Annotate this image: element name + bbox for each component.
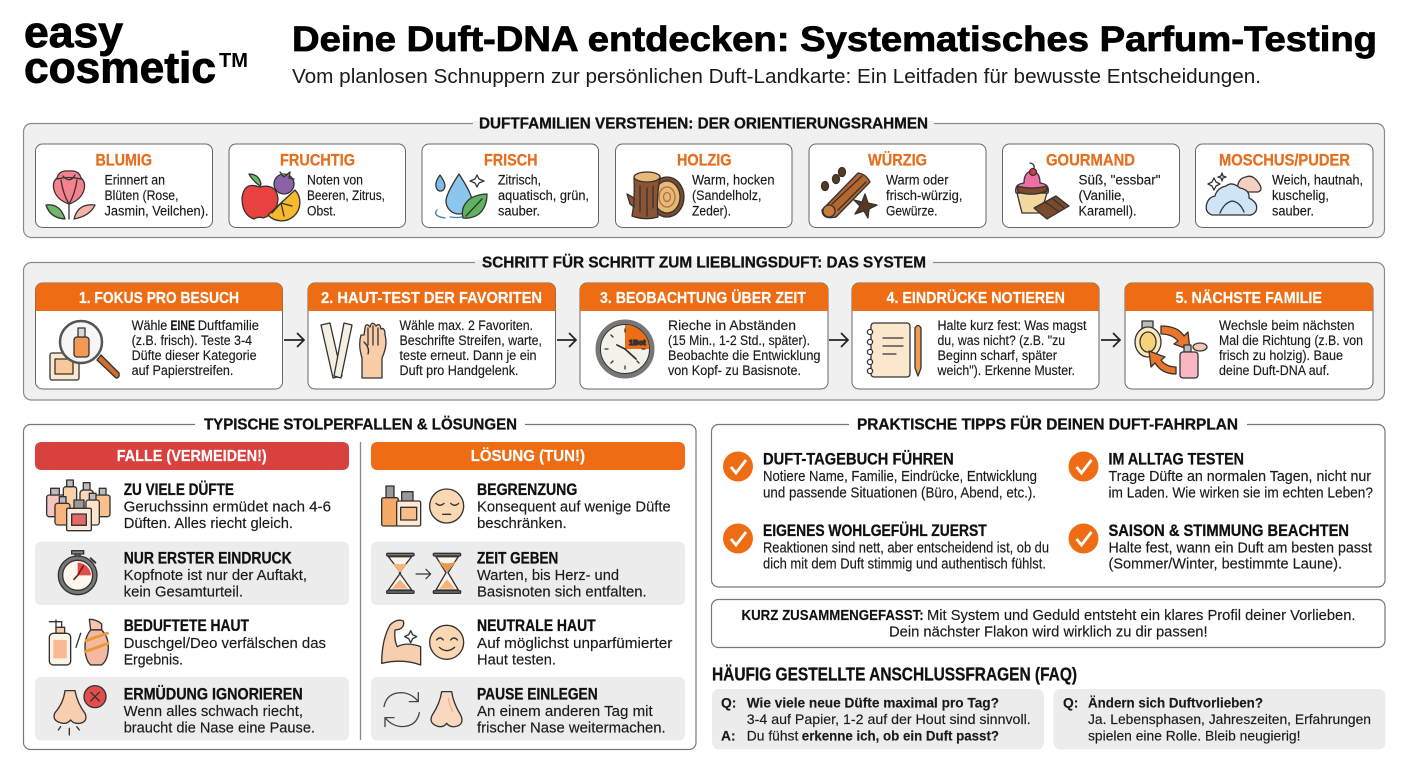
step 2: 2. HAUT-TEST DER FAVORITEN [321, 290, 542, 307]
card: Moschus/Puder: Weich, hautnah, [1272, 172, 1363, 188]
subtitle: Vom planlosen Schnuppern zur persönlichen Duft-Landkarte: Ein Leitfaden für bewusste Entscheidungen. [292, 65, 1261, 88]
icon: tired nose [54, 686, 106, 735]
icon: many bottles [47, 480, 110, 531]
FAQ box 2: Ja. Lebensphasen, Jahreszeiten, Erfahrungen [1088, 712, 1371, 727]
row: Beduftete Haut [49, 616, 326, 668]
card: Moschus/Puder: sauber. [1272, 204, 1314, 218]
step 1: 1. FOKUS PRO BESUCH [79, 290, 239, 307]
step 4: Beginn scharf, später [938, 348, 1058, 363]
icon: cinnamon and star anise [822, 168, 877, 218]
card: Blumig [36, 144, 212, 228]
card: Holzig: Zeder). [692, 204, 731, 218]
logo: easy cosmetic: easy [24, 8, 124, 57]
step 3: (15 Min., 1-2 Std., später). [668, 333, 810, 348]
step 5: 5. NÄCHSTE FAMILIE [1176, 289, 1322, 307]
row: Nur erster Eindruck: NUR ERSTER EINDRUCK [124, 548, 292, 567]
row: Pause einlegen [371, 677, 685, 740]
card: Fruchtig: Obst. [307, 204, 336, 218]
callout: Kurz zusammengefasst: Dein nächster Flakon wird wirklich zu dir passen! [889, 625, 1208, 641]
step 2: Duft pro Handgelenk. [400, 363, 518, 378]
logo: easy cosmetic: TM [219, 50, 248, 72]
row: Neutrale Haut: NEUTRALE HAUT [477, 616, 596, 635]
card: Würzig [809, 144, 986, 228]
header: Lösung: LÖSUNG (TUN!) [471, 446, 585, 465]
card: Gourmand: Karamell). [1078, 204, 1136, 218]
step 2: teste erneut. Dann je ein [400, 348, 536, 363]
card: Würzig: Gewürze. [886, 204, 938, 218]
icon: magnifier over bottle [50, 321, 119, 380]
step 2: Beschrifte Streifen, warte, [400, 333, 542, 348]
row: Neutrale Haut [382, 616, 672, 668]
callout: Kurz zusammengefasst [712, 600, 1385, 648]
step 3: von Kopf- zu Basisnote. [668, 363, 801, 378]
card: Würzig: Warm oder [886, 172, 949, 188]
tip: Saison und Stimmung [1068, 522, 1372, 572]
step 5: Mal die Richtung (z.B. von [1219, 333, 1363, 348]
icon: bottles with swap arrows [1135, 321, 1207, 378]
card: Blumig: Erinnert an [104, 172, 165, 188]
icon: arm and smile [382, 620, 464, 665]
header: Lösung [371, 442, 685, 470]
icon: cycle and nose [384, 692, 462, 727]
row: Beduftete Haut: Ergebnis. [124, 652, 183, 668]
logo: easy cosmetic: cosmetic [24, 44, 216, 92]
FAQ box 1: 3-4 auf Papier, 1-2 auf der Hout sind sinnvoll. [747, 712, 1031, 727]
row: Zu viele Düfte: Düften. Alles riecht gleich. [124, 516, 293, 532]
row: Beduftete Haut: BEDUFTETE HAUT [124, 616, 249, 635]
panel: Duftfamilien [24, 116, 1384, 238]
card: Blumig: Jasmin, Veilchen). [104, 204, 208, 218]
card: Blumig: Blüten (Rose, [104, 188, 178, 203]
row: Ermüdung ignorieren: Wenn alles schwach riecht, [124, 704, 303, 720]
tip: Eigenes Wohlgefühl [723, 521, 1049, 572]
card: Blumig: BLUMIG [96, 152, 152, 170]
step 4: weich"). Erkenne Muster. [937, 363, 1075, 378]
row: Ermüdung ignorieren: braucht die Nase eine Pause. [124, 720, 315, 736]
card: Fruchtig [229, 144, 406, 228]
row: Pause einlegen: PAUSE EINLEGEN [477, 684, 598, 703]
tip: Saison und Stimmung: Halte fest, wann ein Duft am besten passt [1108, 540, 1372, 556]
step 1 [36, 283, 282, 389]
card: Gourmand: Süß, "essbar" [1078, 172, 1161, 188]
icon: water drop and leaf [436, 174, 487, 218]
step 5: Wechsle beim nächsten [1219, 318, 1354, 333]
arrow 1 [284, 333, 304, 347]
panel: Stolperfallen [24, 414, 696, 750]
FAQ box 1 [712, 689, 1044, 750]
row: Nur erster Eindruck [35, 542, 349, 605]
tip: Eigenes Wohlgefühl: dich mit dem Duft stimmig und authentisch fühlst. [763, 556, 1046, 572]
tip: Saison und Stimmung: SAISON & STIMMUNG BEACHTEN [1108, 522, 1349, 540]
icon: paper strips and hand [321, 323, 386, 378]
icon: powder cloud [1206, 173, 1261, 215]
FAQ box 1: A: [721, 728, 736, 743]
heading: Duftfamilien: DUFTFAMILIEN VERSTEHEN: DER ORIENTIERUNGSRAHMEN [479, 116, 928, 132]
heading: Praktische Tipps: PRAKTISCHE TIPPS FÜR DEINEN DUFT-FAHRPLAN [857, 414, 1238, 434]
step 3 [580, 283, 828, 389]
tip: Im Alltag testen: IM ALLTAG TESTEN [1108, 450, 1244, 468]
panel: Praktische Tipps [712, 414, 1385, 587]
tip: Im Alltag testen: im Laden. Wie wirken sie im echten Leben? [1108, 485, 1373, 501]
card: Moschus/Puder: kuschelig, [1272, 188, 1329, 203]
step 2 [308, 283, 556, 389]
icon: notebook and pencil [867, 323, 921, 377]
FAQ box 2: Ändern sich Duftvorlieben? [1088, 694, 1263, 710]
heading: FAQ: HÄUFIG GESTELLTE ANSCHLUSSFRAGEN (FAQ) [712, 664, 1077, 684]
card: Holzig: HOLZIG [677, 152, 732, 170]
card: Holzig: (Sandelholz, [692, 188, 762, 203]
row: Zeit geben: Basisnoten sich entfalten. [477, 584, 647, 600]
step 1: Duftfamilie [198, 318, 259, 333]
FAQ box 1: Q: [721, 695, 736, 710]
icon: two bottles and calm face [382, 486, 464, 526]
FAQ box 2 [1054, 689, 1386, 750]
step 3: 3. BEOBACHTUNG ÜBER ZEIT [600, 288, 806, 307]
icon: pump bottle and deodorant [49, 619, 108, 665]
icon: hourglasses [387, 553, 461, 593]
step 4: 4. EINDRÜCKE NOTIEREN [886, 288, 1065, 307]
step 1: Wähle [132, 318, 167, 333]
title: Deine Duft-DNA entdecken: Systematisches Parfum-Testing [292, 20, 1377, 59]
row: Zeit geben [371, 542, 685, 605]
icon: rose [46, 171, 95, 219]
tip: Duft-Tagebuch [723, 449, 1037, 501]
step 5: frisch zu holzig). Baue [1219, 348, 1343, 363]
icon: cupcake and chocolate [1016, 163, 1069, 219]
row: Ermüdung ignorieren: ERMÜDUNG IGNORIEREN [124, 684, 303, 703]
arrow 4 [1101, 333, 1120, 347]
heading: Stolperfallen: TYPISCHE STOLPERFALLEN & LÖSUNGEN [204, 414, 517, 434]
row: Pause einlegen: frischer Nase weitermachen. [477, 720, 666, 736]
row: Nur erster Eindruck: kein Gesamturteil. [124, 584, 243, 600]
step 2: Wähle max. 2 Favoriten. [400, 318, 533, 333]
tip: Duft-Tagebuch: Notiere Name, Familie, Eindrücke, Entwicklung [763, 469, 1037, 485]
arrow 3 [829, 333, 848, 347]
header: Falle: FALLE (VERMEIDEN!) [117, 448, 267, 465]
FAQ box 1: erkenne ich, ob ein Duft passt? [802, 728, 999, 743]
row: Zeit geben: Warten, bis Herz- und [477, 568, 619, 584]
logo: easy cosmetic [24, 8, 248, 92]
card: Frisch: aquatisch, grün, [498, 188, 589, 203]
card: Frisch: Zitrisch, [498, 172, 541, 188]
tip: Saison und Stimmung: (Sommer/Winter, bestimmte Laune). [1108, 556, 1342, 572]
row: Begrenzung: beschränken. [477, 516, 567, 532]
card: Frisch: sauber. [498, 204, 540, 218]
step 1: auf Papierstreifen. [132, 363, 233, 378]
callout: Kurz zusammengefasst: Mit System und Geduld entsteht ein klares Profil deiner Vorlieben. [927, 608, 1356, 624]
FAQ box 2: Q: [1063, 695, 1078, 710]
step 4: Halte kurz fest: Was magst [938, 318, 1087, 333]
step 4 [852, 283, 1099, 389]
card: Würzig: frisch-würzig, [886, 188, 962, 203]
card: Moschus/Puder [1196, 144, 1373, 228]
card: Frisch: FRISCH [484, 152, 538, 170]
icon: clock: 1Bot [629, 338, 646, 347]
step 3: Rieche in Abständen [668, 318, 796, 333]
step 1: EINE [170, 318, 195, 333]
row: Begrenzung [382, 480, 671, 532]
row: Pause einlegen: An einem anderen Tag mit [477, 704, 653, 720]
tip: Im Alltag testen: Trage Düfte an normalen Tagen, nicht nur [1108, 469, 1371, 485]
card: Holzig [616, 144, 792, 228]
step 5 [1125, 283, 1373, 389]
row: Zu viele Düfte: Geruchssinn ermüdet nach 4-6 [124, 500, 331, 516]
icon: stopwatch [58, 551, 97, 595]
row: Zu viele Düfte: ZU VIELE DÜFTE [124, 480, 234, 499]
row: Zeit geben: ZEIT GEBEN [477, 548, 558, 567]
callout: Kurz zusammengefasst: KURZ ZUSAMMENGEFASST: [742, 608, 924, 624]
card: Gourmand: GOURMAND [1046, 152, 1135, 170]
icon: clock [598, 322, 652, 376]
card: Moschus/Puder: MOSCHUS/PUDER [1219, 152, 1350, 170]
FAQ box 2: spielen eine Rolle. Bleib neugierig! [1088, 728, 1300, 743]
card: Fruchtig: Noten von [307, 172, 363, 188]
heading: Schritte: SCHRITT FÜR SCHRITT ZUM LIEBLINGSDUFT: DAS SYSTEM [482, 252, 926, 272]
tip: Duft-Tagebuch: DUFT-TAGEBUCH FÜHREN [763, 449, 954, 468]
icon: fruit [242, 172, 300, 221]
card: Würzig: WÜRZIG [868, 150, 927, 170]
row: Zu viele Düfte [47, 480, 331, 532]
row: Neutrale Haut: Haut testen. [477, 652, 556, 668]
FAQ box 1: Wie viele neue Düfte maximal pro Tag? [747, 695, 999, 710]
card: Frisch [422, 144, 598, 228]
tip: Duft-Tagebuch: und passende Situationen (Büro, Abend, etc.). [763, 485, 1036, 501]
card: Gourmand [1002, 144, 1180, 228]
step 1: (z.B. frisch). Teste 3-4 [132, 333, 253, 348]
FAQ box 1: Du fühst [747, 728, 798, 743]
tip: Im Alltag testen [1068, 450, 1373, 501]
row: Neutrale Haut: Auf möglichst unparfümierter [477, 636, 672, 652]
card: Fruchtig: FRUCHTIG [280, 152, 355, 170]
step 4: du, was nicht? (z.B. "zu [938, 333, 1065, 348]
card: Holzig: Warm, hocken [692, 172, 774, 188]
row: Begrenzung: BEGRENZUNG [477, 480, 577, 499]
panel: Schritte [24, 252, 1384, 400]
step 5: deine Duft-DNA auf. [1219, 363, 1330, 378]
row: Begrenzung: Konsequent auf wenige Düfte [477, 500, 671, 516]
step 1: Düfte dieser Kategorie [132, 348, 257, 363]
header: Falle [35, 442, 349, 470]
tip: Eigenes Wohlgefühl: Reaktionen sind nett, aber entscheidend ist, ob du [763, 540, 1049, 556]
row: Ermüdung ignorieren [35, 677, 349, 740]
card: Fruchtig: Beeren, Zitrus, [307, 188, 385, 203]
row: Beduftete Haut: Duschgel/Deo verfälschen das [124, 636, 326, 652]
tip: Eigenes Wohlgefühl: EIGENES WOHLGEFÜHL ZUERST [763, 521, 987, 540]
arrow 2 [557, 333, 576, 347]
step 3: Beobachte die Entwicklung [668, 348, 820, 363]
icon: wood logs [627, 172, 684, 219]
row: Nur erster Eindruck: Kopfnote ist nur der Auftakt, [124, 568, 307, 584]
card: Gourmand: (Vanilie, [1078, 188, 1125, 203]
